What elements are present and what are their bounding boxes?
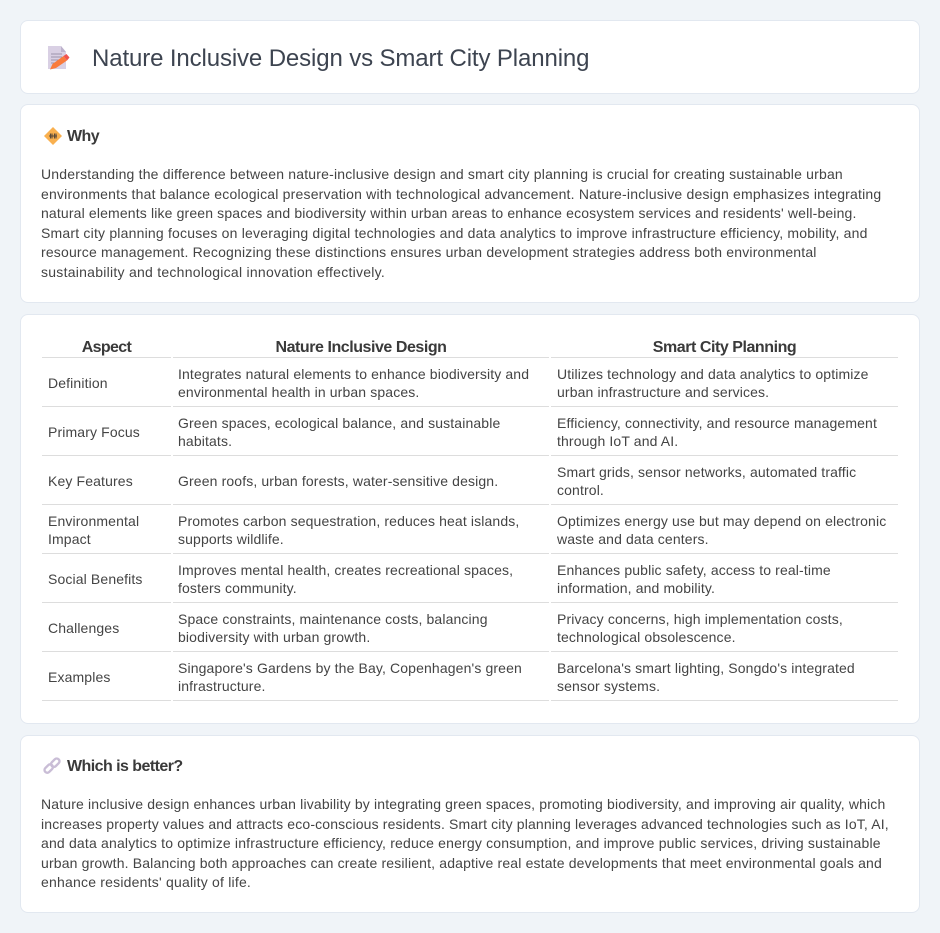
panel: comparison table xyxy=(20,314,920,724)
text block: which is better xyxy=(41,796,889,890)
comparison table: fosters community. xyxy=(178,580,297,596)
text block: why: sustainability and technological innovation effectively. xyxy=(41,264,385,280)
comparison table: Examples xyxy=(48,669,111,685)
comparison table: Nature Inclusive Design xyxy=(275,339,447,356)
text block: which is better: urban growth. Balancing both approaches can create resilient, adaptive real estate developments that meet environmental goals and xyxy=(41,855,882,871)
comparison table xyxy=(42,339,898,701)
comparison table: information, and mobility. xyxy=(557,580,715,596)
comparison table: Smart City Planning xyxy=(653,339,796,356)
comparison table: biodiversity with urban growth. xyxy=(178,629,370,645)
text block: which is better: increases property values and attracts eco-conscious residents. Smart city planning leverages advanced technologies such as IoT, AI, xyxy=(41,816,889,832)
comparison table: Integrates natural elements to enhance biodiversity and xyxy=(178,366,529,382)
text block: which is better: enhance residents' quality of life. xyxy=(41,874,251,890)
comparison table: environmental health in urban spaces. xyxy=(178,384,419,400)
heading: why: Why xyxy=(67,128,99,145)
text block: why: Smart city planning focuses on leveraging digital technologies and data analytics to improve infrastructure efficiency, mobility, and xyxy=(41,225,868,241)
comparison table: Challenges xyxy=(48,620,119,636)
comparison table: Enhances public safety, access to real-time xyxy=(557,562,831,578)
comparison table: Impact xyxy=(48,531,91,547)
comparison table: technological obsolescence. xyxy=(557,629,736,645)
comparison table: Definition xyxy=(48,375,108,391)
comparison table: Social Benefits xyxy=(48,571,143,587)
icon: document with pencil xyxy=(48,46,70,70)
title: Nature Inclusive Design vs Smart City Planning xyxy=(92,45,589,72)
icon: chain link xyxy=(43,757,61,774)
comparison table: Privacy concerns, high implementation costs, xyxy=(557,611,843,627)
comparison table: Promotes carbon sequestration, reduces heat islands, xyxy=(178,513,519,529)
text block: which is better: and data analytics to optimize infrastructure efficiency, reduce energy consumption, and improve public services, driving sustainable xyxy=(41,835,881,851)
comparison table: Green spaces, ecological balance, and sustainable xyxy=(178,415,500,431)
comparison table: supports wildlife. xyxy=(178,531,284,547)
comparison table: Barcelona's smart lighting, Songdo's integrated xyxy=(557,660,855,676)
comparison table: sensor systems. xyxy=(557,678,660,694)
comparison table: Smart grids, sensor networks, automated traffic xyxy=(557,464,856,480)
comparison table: through IoT and AI. xyxy=(557,433,678,449)
comparison table: Optimizes energy use but may depend on electronic xyxy=(557,513,886,529)
icon: orange diamond xyxy=(44,127,62,145)
comparison table: infrastructure. xyxy=(178,678,266,694)
text block: why xyxy=(41,166,881,280)
comparison table: Efficiency, connectivity, and resource management xyxy=(557,415,877,431)
comparison table: Key Features xyxy=(48,473,133,489)
comparison table: Space constraints, maintenance costs, balancing xyxy=(178,611,488,627)
text block: which is better: Nature inclusive design enhances urban livability by integrating green spaces, promoting biodiversity, and improving air quality, which xyxy=(41,796,885,812)
panel: which is better xyxy=(20,735,920,913)
comparison table: Primary Focus xyxy=(48,424,140,440)
comparison table: habitats. xyxy=(178,433,232,449)
comparison table: Aspect xyxy=(82,339,131,356)
comparison table: Utilizes technology and data analytics to optimize xyxy=(557,366,869,382)
comparison table: Singapore's Gardens by the Bay, Copenhagen's green xyxy=(178,660,522,676)
heading: which is better: Which is better? xyxy=(67,758,183,775)
comparison table: Environmental xyxy=(48,513,139,529)
comparison table: control. xyxy=(557,482,604,498)
text block: why: environments that balance ecological preservation with technological advancement. Nature-inclusive design emphasizes integrating xyxy=(41,186,881,202)
panel: why xyxy=(20,104,920,303)
text block: why: Understanding the difference between nature-inclusive design and smart city planning is crucial for creating sustainable urban xyxy=(41,166,843,182)
panel: header xyxy=(20,20,920,94)
text block: why: resource management. Recognizing these distinctions ensures urban development strategies address both environmental xyxy=(41,244,817,260)
comparison table: Green roofs, urban forests, water-sensitive design. xyxy=(178,473,498,489)
text block: why: natural elements like green spaces and biodiversity within urban areas to enhance ecosystem services and residents' well-being. xyxy=(41,205,856,221)
comparison table: waste and data centers. xyxy=(557,531,709,547)
comparison table: Improves mental health, creates recreational spaces, xyxy=(178,562,513,578)
comparison table: urban infrastructure and services. xyxy=(557,384,769,400)
